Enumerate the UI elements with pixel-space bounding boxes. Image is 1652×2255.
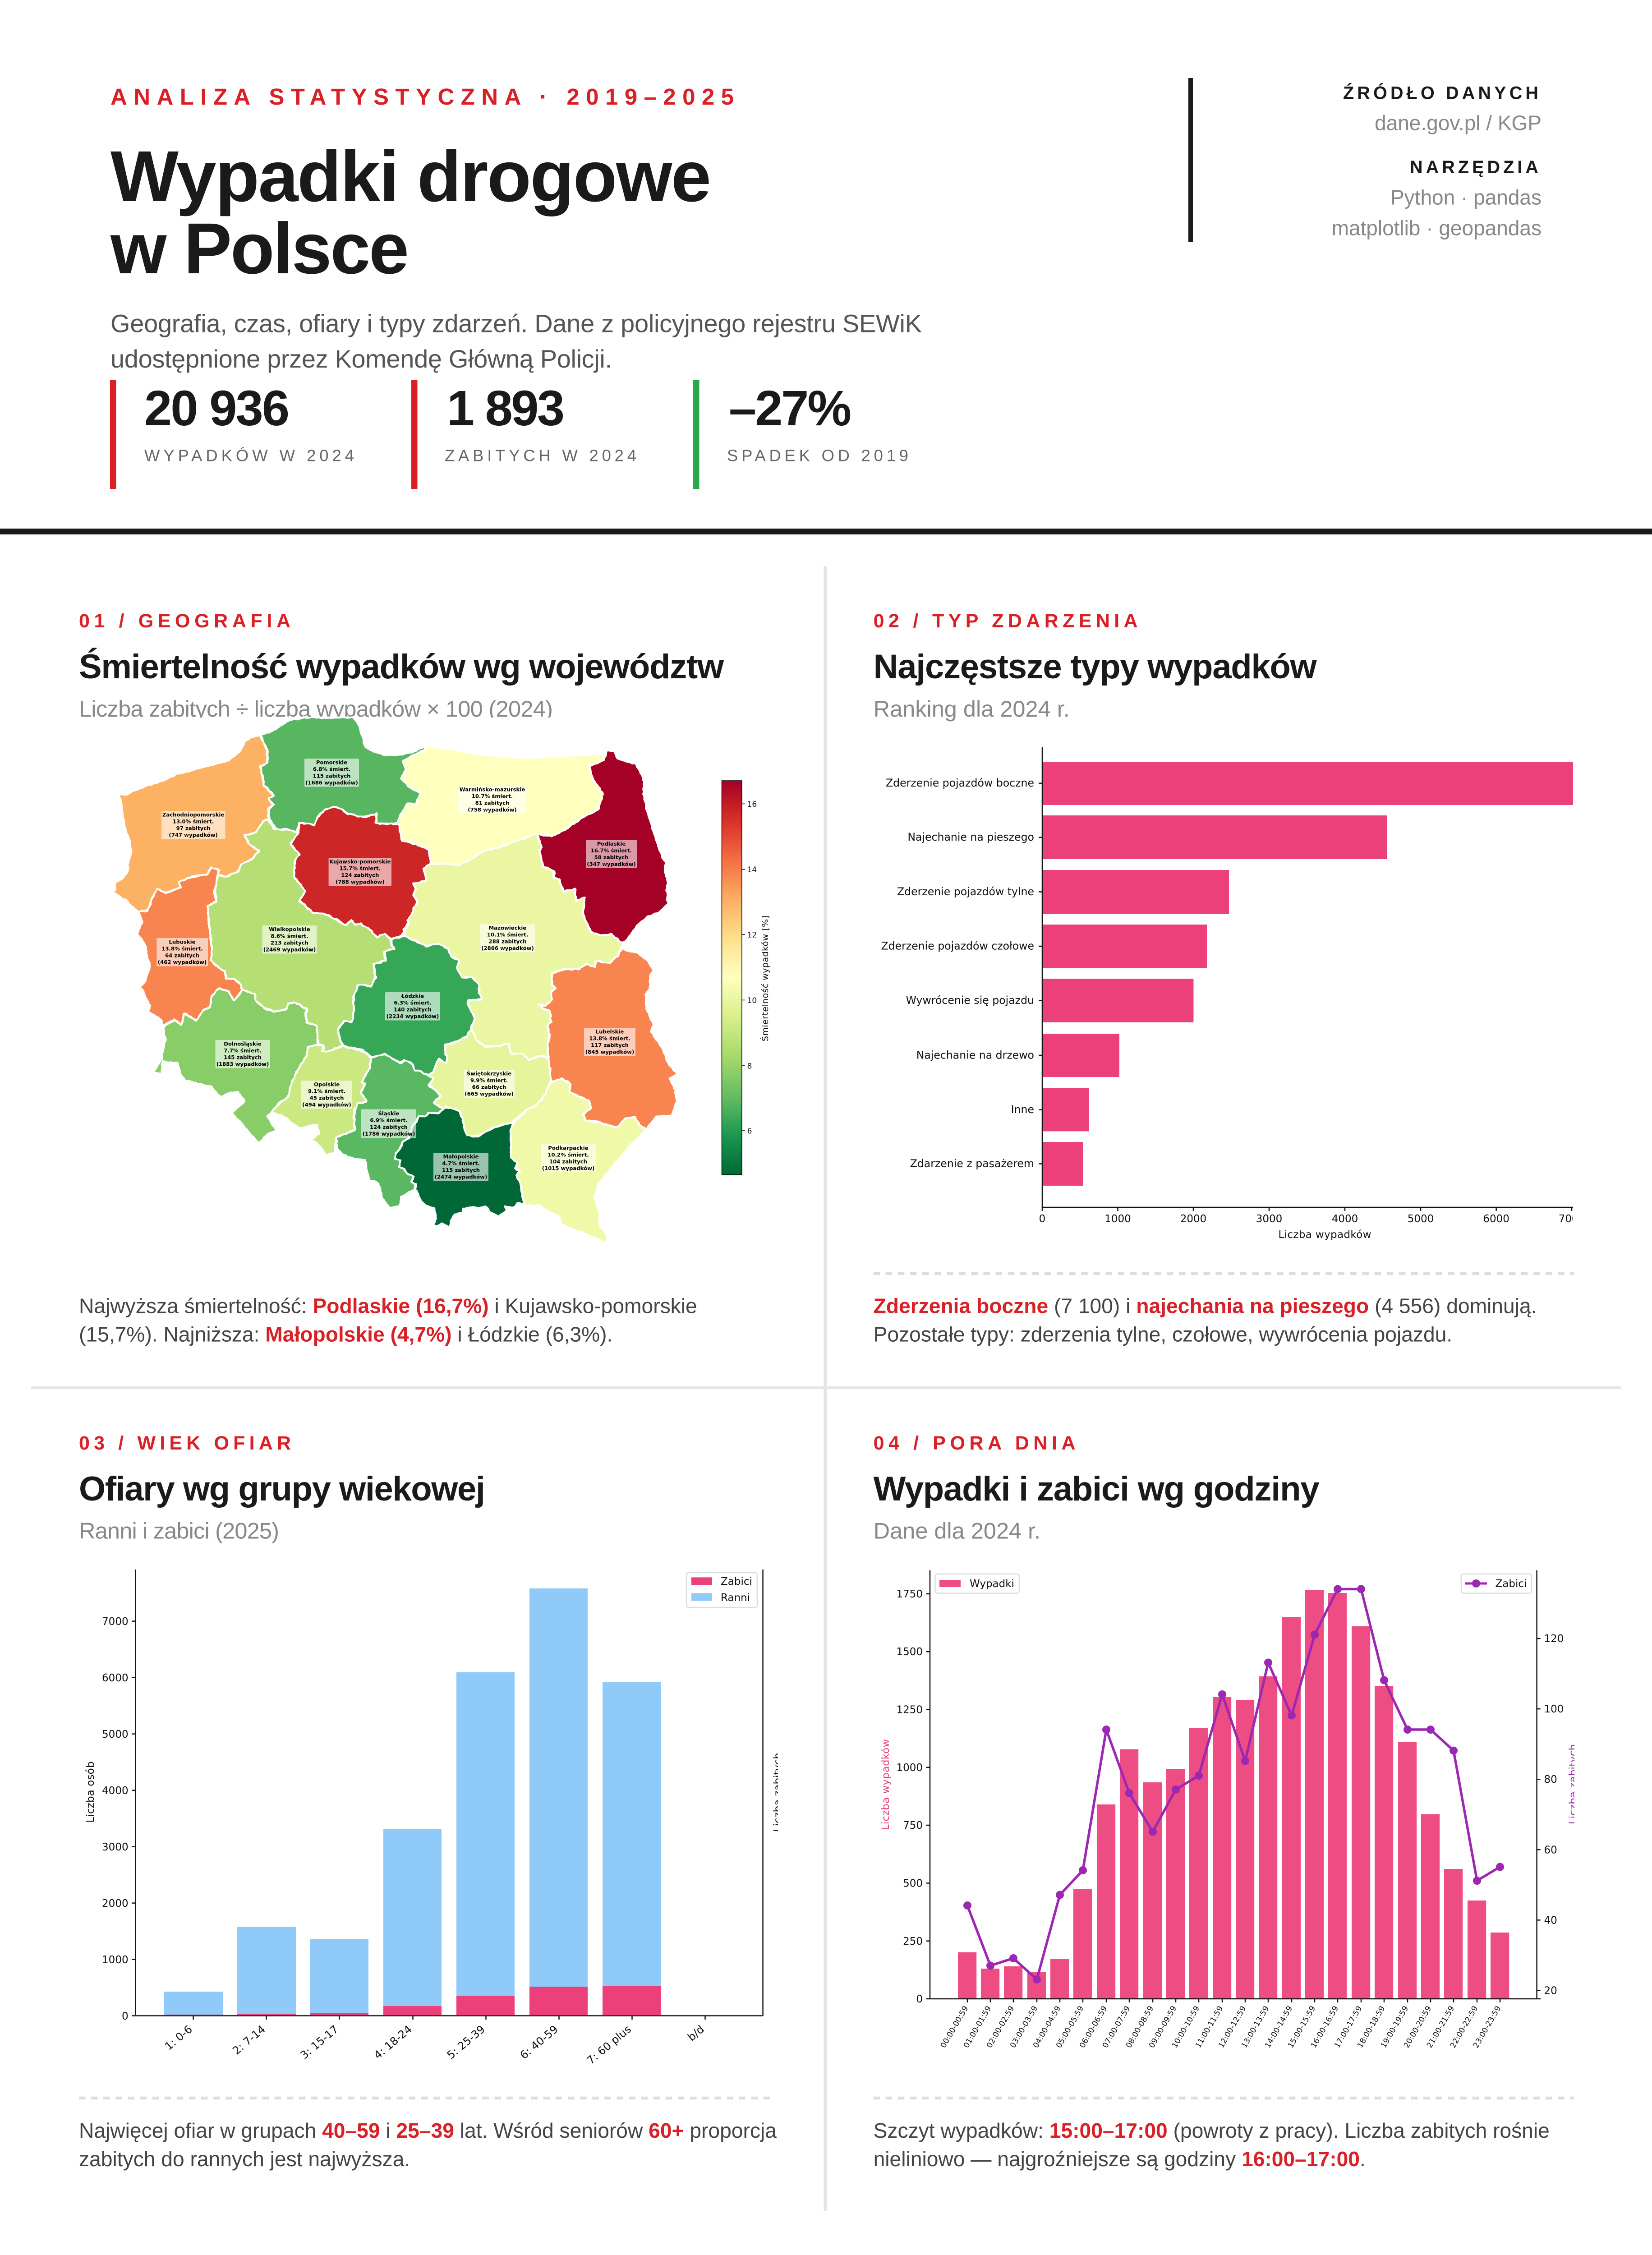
combo chart: godziny: 21:00-21:59: [1425, 2004, 1456, 2050]
combo chart: godziny: 04:00-04:59: [1031, 2004, 1063, 2050]
map label: Lubuskie: Lubuskie: [169, 939, 196, 945]
map label: Warmińsko-mazurskie: [458, 786, 526, 814]
combo chart: godziny: Liczba zabitych: [1567, 1744, 1579, 1824]
stacked bar chart: wiek: 7000: [102, 1616, 129, 1628]
combo chart: godziny: 16:00-16:59: [1309, 2004, 1340, 2050]
section subtitle 04: Dane dla 2024 r.: [874, 1518, 1040, 1544]
note 02: [874, 1294, 1537, 1346]
stacked bar chart: wiek: 6: 40-59: [518, 2023, 561, 2062]
map label: Podlaskie: 58 zabitych: [594, 854, 628, 861]
colorbar legend: 16: [747, 800, 757, 809]
section subtitle 01: Liczba zabitych ÷ liczba wypadków × 100 (2024): [79, 696, 553, 722]
header: [110, 78, 1542, 489]
map label: Zachodniopomorskie: [161, 811, 225, 839]
region: Zachodniopomorskie: [113, 735, 274, 911]
map label: Warmińsko-mazurskie: Warmińsko-mazurskie: [460, 787, 525, 793]
region: Kujawsko-pomorskie: [290, 807, 431, 939]
stacked bar chart: wiek: 5: 25-39: [445, 2023, 488, 2062]
stacked bar chart: wiek: [85, 1569, 805, 2067]
bar chart: typy wypadków: [881, 747, 1600, 1241]
map label: Pomorskie: (1686 wypadków): [305, 780, 358, 786]
map label: Mazowieckie: 288 zabitych: [489, 939, 526, 945]
legend: zabici: [1461, 1574, 1532, 1593]
map label: Mazowieckie: Mazowieckie: [489, 925, 526, 931]
combo chart: godziny: 40: [1544, 1915, 1557, 1927]
note 01: Najwyższa śmiertelność: Podlaskie (16,7%) i Kujawsko-pomorskie: [79, 1294, 697, 1318]
bar chart: typy wypadków: 4000: [1332, 1213, 1358, 1225]
map label: Wielkopolskie: [262, 925, 317, 953]
bar chart: typy wypadków: Inne: [1011, 1103, 1034, 1116]
colorbar legend: 12: [747, 931, 757, 940]
map label: Zachodniopomorskie: 13.0% śmiert.: [173, 819, 214, 825]
note 01: (15,7%). Najniższa: Małopolskie (4,7%) i Łódzkie (6,3%).: [79, 1323, 612, 1346]
combo chart: godziny: 1000: [896, 1762, 923, 1774]
source block: NARZĘDZIA: [1410, 157, 1538, 177]
note 01: [79, 1294, 697, 1346]
combo chart: godziny: 14:00-14:59: [1263, 2004, 1294, 2050]
combo chart: godziny: 15:00-15:59: [1286, 2004, 1317, 2050]
note 04: [874, 2119, 1550, 2171]
map label: Podkarpackie: 10.2% śmiert.: [548, 1152, 589, 1158]
map label: Pomorskie: 115 zabitych: [313, 773, 350, 779]
note 04: Szczyt wypadków: 15:00–17:00 (powroty z pracy). Liczba zabitych rośnie: [874, 2119, 1550, 2142]
region: Małopolskie: [395, 1107, 525, 1228]
source block: Python · pandas: [1390, 186, 1542, 209]
combo chart: godziny: 13:00-13:59: [1240, 2004, 1271, 2050]
colorbar legend: Śmiertelność wypadków [%]: [759, 916, 770, 1041]
region: Podlaskie: [537, 750, 668, 943]
map label: Lubelskie: [584, 1028, 635, 1056]
map label: Małopolskie: [433, 1153, 488, 1181]
bar chart: typy wypadków: 3000: [1256, 1213, 1282, 1225]
map label: Lubelskie: (845 wypadków): [585, 1049, 634, 1055]
map label: Dolnośląskie: (1883 wypadków): [216, 1061, 269, 1068]
region: Łódzkie: [337, 936, 482, 1076]
combo chart: godziny: 22:00-22:59: [1449, 2004, 1480, 2050]
map label: Świętokrzyskie: Świętokrzyskie: [467, 1070, 511, 1077]
stacked bar chart: wiek: 6000: [102, 1672, 129, 1684]
combo chart: godziny: 500: [903, 1878, 923, 1890]
map label: Opolskie: [301, 1081, 352, 1109]
combo chart: godziny: 80: [1544, 1774, 1557, 1786]
map label: Lubuskie: 13.8% śmiert.: [161, 946, 203, 952]
map label: Warmińsko-mazurskie: 81 zabitych: [475, 800, 509, 806]
panel: wiek ofiar: [79, 1432, 805, 2171]
combo chart: godziny: 01:00-01:59: [962, 2004, 993, 2050]
bar chart: typy wypadków: Wywrócenie się pojazdu: [906, 994, 1034, 1007]
combo chart: godziny: 00:00-00:59: [939, 2004, 970, 2050]
map label: Kujawsko-pomorskie: (788 wypadków): [336, 879, 385, 885]
map label: Kujawsko-pomorskie: 124 zabitych: [341, 872, 379, 879]
region: Wielkopolskie: [207, 819, 395, 1052]
map label: Lubelskie: 117 zabitych: [591, 1042, 629, 1049]
combo chart: godziny: 0: [916, 1993, 923, 2005]
panel: pora dnia: [874, 1432, 1601, 2171]
stacked bar chart: wiek: Liczba osób: [85, 1762, 97, 1823]
map label: Świętokrzyskie: (665 wypadków): [465, 1091, 514, 1097]
map label: Podkarpackie: Podkarpackie: [548, 1145, 589, 1151]
map label: Kujawsko-pomorskie: [329, 858, 391, 886]
stacked bar chart: wiek: 2: 7-14: [230, 2023, 268, 2057]
combo chart: godziny: 08:00-08:59: [1124, 2004, 1155, 2050]
legend: wiek: Ranni: [721, 1592, 750, 1604]
map label: Małopolskie: (2474 wypadków): [435, 1174, 487, 1180]
source block: ŹRÓDŁO DANYCH: [1343, 83, 1538, 103]
map label: Podlaskie: [586, 840, 637, 868]
note 02: Pozostałe typy: zderzenia tylne, czołowe, wywrócenia pojazdu.: [874, 1323, 1452, 1346]
section subtitle 03: Ranni i zabici (2025): [79, 1518, 279, 1544]
map label: Dolnośląskie: [216, 1040, 270, 1068]
bar chart: typy wypadków: Zderzenie pojazdów boczne: [886, 777, 1034, 789]
stat: zabici: 1 893: [447, 381, 565, 436]
map label: Łódzkie: Łódzkie: [401, 993, 424, 999]
colorbar legend: 10: [747, 996, 757, 1005]
stacked bar chart: wiek: 5000: [102, 1729, 129, 1740]
bar chart: typy wypadków: Zdarzenie z pasażerem: [910, 1157, 1034, 1170]
combo chart: godziny: 09:00-09:59: [1147, 2004, 1178, 2050]
legend: wiek: [686, 1573, 757, 1607]
map label: Opolskie: 45 zabitych: [310, 1095, 344, 1101]
combo chart: godziny: [880, 1570, 1601, 2050]
legend: wypadki: Wypadki: [970, 1578, 1014, 1590]
subtitle: udostępnione przez Komendę Główną Policji.: [110, 345, 612, 373]
map label: Lubuskie: [156, 938, 208, 966]
combo chart: godziny: 06:00-06:59: [1078, 2004, 1109, 2050]
stacked bar chart: wiek: 2000: [102, 1898, 129, 1910]
stacked bar chart: wiek: 3000: [102, 1841, 129, 1853]
map label: Pomorskie: Pomorskie: [316, 759, 347, 766]
section heading 04: Wypadki i zabici wg godziny: [874, 1470, 1320, 1508]
map label: Podlaskie: Podlaskie: [597, 841, 626, 847]
region: Opolskie: [272, 1045, 371, 1155]
region: Świętokrzyskie: [428, 1030, 551, 1137]
stacked bar chart: wiek: 1: 0-6: [162, 2023, 195, 2053]
section label 02: 02 / TYP ZDARZENIA: [874, 610, 1138, 632]
combo chart: godziny: Liczba wypadków: [880, 1739, 892, 1830]
eyebrow: ANALIZA STATYSTYCZNA · 2019–2025: [110, 84, 734, 110]
bar chart: typy wypadków: Liczba wypadków: [1278, 1229, 1371, 1241]
map label: Opolskie: (494 wypadków): [302, 1102, 351, 1108]
map label: Podlaskie: 16.7% śmiert.: [591, 847, 632, 854]
combo chart: godziny: 750: [903, 1820, 923, 1832]
map label: Zachodniopomorskie: (747 wypadków): [169, 832, 218, 838]
bar chart: typy wypadków: Zderzenie pojazdów tylne: [897, 885, 1034, 898]
combo chart: godziny: 60: [1544, 1845, 1557, 1856]
combo chart: godziny: 11:00-11:59: [1194, 2004, 1225, 2050]
panel: typ zdarzenia: [874, 610, 1600, 1346]
combo chart: godziny: 250: [903, 1936, 923, 1947]
note 04: nieliniowo — najgroźniejsze są godziny 16:00–17:00.: [874, 2147, 1366, 2171]
map label: Łódzkie: 140 zabitych: [394, 1007, 432, 1013]
combo chart: godziny: 120: [1544, 1633, 1564, 1645]
note 03: Najwięcej ofiar w grupach 40–59 i 25–39 lat. Wśród seniorów 60+ proporcja: [79, 2119, 777, 2142]
map label: Świętokrzyskie: 9.9% śmiert.: [470, 1077, 508, 1084]
subtitle: Geografia, czas, ofiary i typy zdarzeń. Dane z policyjnego rejestru SEWiK: [110, 309, 922, 338]
colorbar legend: 6: [747, 1127, 752, 1136]
map label: Mazowieckie: [480, 924, 535, 953]
combo chart: godziny: 1750: [896, 1588, 923, 1600]
map label: Śląskie: [361, 1109, 416, 1138]
bar chart: typy wypadków: Zderzenie pojazdów czołowe: [881, 940, 1034, 953]
bar chart: typy wypadków: 1000: [1104, 1213, 1131, 1225]
map label: Łódzkie: 6.3% śmiert.: [394, 1000, 432, 1006]
section subtitle 02: Ranking dla 2024 r.: [874, 696, 1070, 722]
stat: spadek: –27%: [729, 381, 851, 436]
section heading 02: Najczęstsze typy wypadków: [874, 648, 1317, 686]
map label: Wielkopolskie: 8.6% śmiert.: [271, 933, 308, 939]
stat: wypadki: WYPADKÓW W 2024: [144, 446, 354, 465]
note 02: Zderzenia boczne (7 100) i najechania na pieszego (4 556) dominują.: [874, 1294, 1537, 1318]
stat: zabici: ZABITYCH W 2024: [445, 446, 636, 465]
combo chart: godziny: 12:00-12:59: [1217, 2004, 1248, 2050]
map label: Małopolskie: 115 zabitych: [442, 1167, 480, 1174]
bar chart: typy wypadków: 2000: [1180, 1213, 1206, 1225]
combo chart: godziny: 23:00-23:59: [1472, 2004, 1503, 2050]
title: [110, 136, 711, 289]
stacked bar chart: wiek: Liczba zabitych: [772, 1753, 784, 1832]
map label: Wielkopolskie: 213 zabitych: [271, 940, 308, 946]
title: Wypadki drogowe: [110, 136, 711, 216]
combo chart: godziny: 02:00-02:59: [985, 2004, 1016, 2050]
section heading 01: Śmiertelność wypadków wg województw: [79, 648, 724, 686]
colorbar legend: 14: [747, 865, 757, 874]
map label: Mazowieckie: (2866 wypadków): [481, 945, 534, 952]
source block: dane.gov.pl / KGP: [1375, 111, 1542, 134]
map label: Lubelskie: 13.8% śmiert.: [589, 1035, 630, 1042]
stacked bar chart: wiek: 4000: [102, 1785, 129, 1797]
stat: spadek: [693, 380, 908, 489]
bar chart: typy wypadków: Najechanie na pieszego: [907, 831, 1034, 843]
map label: Opolskie: Opolskie: [314, 1081, 340, 1088]
choropleth map: [113, 718, 679, 1244]
region: Śląskie: [336, 1054, 443, 1208]
map label: Śląskie: 124 zabitych: [370, 1124, 408, 1130]
section label 03: 03 / WIEK OFIAR: [79, 1432, 291, 1454]
region: Podkarpackie: [511, 1079, 647, 1244]
map label: Dolnośląskie: Dolnośląskie: [224, 1041, 262, 1047]
legend: zabici: Zabici: [1496, 1578, 1527, 1590]
region: Lubelskie: [538, 947, 679, 1129]
map label: Kujawsko-pomorskie: Kujawsko-pomorskie: [329, 859, 391, 865]
section heading 03: Ofiary wg grupy wiekowej: [79, 1470, 485, 1508]
map label: Podkarpackie: [541, 1144, 596, 1172]
map label: Mazowieckie: 10.1% śmiert.: [487, 932, 528, 938]
combo chart: godziny: 20: [1544, 1985, 1557, 1997]
colorbar legend: [722, 781, 770, 1175]
map label: Podkarpackie: (1015 wypadków): [542, 1165, 594, 1172]
bar chart: typy wypadków: Najechanie na drzewo: [916, 1049, 1034, 1062]
combo chart: godziny: 17:00-17:59: [1333, 2004, 1364, 2050]
bar chart: typy wypadków: 5000: [1408, 1213, 1434, 1225]
stacked bar chart: wiek: 0: [122, 2011, 129, 2022]
combo chart: godziny: 100: [1544, 1703, 1564, 1715]
stacked bar chart: wiek: b/d: [685, 2023, 707, 2043]
stacked bar chart: wiek: 3: 15-17: [298, 2023, 341, 2062]
combo chart: godziny: 18:00-18:59: [1356, 2004, 1387, 2050]
source block: [1188, 78, 1542, 242]
map label: Małopolskie: Małopolskie: [443, 1154, 479, 1160]
panel: geografia: [77, 610, 812, 1346]
section label 04: 04 / PORA DNIA: [874, 1432, 1076, 1454]
map label: Opolskie: 9.1% śmiert.: [308, 1088, 345, 1095]
map label: Lubelskie: Lubelskie: [596, 1029, 624, 1035]
map label: Wielkopolskie: (2469 wypadków): [263, 947, 316, 953]
note 03: [79, 2119, 777, 2171]
map label: Dolnośląskie: 7.7% śmiert.: [224, 1048, 262, 1054]
stacked bar chart: wiek: 7: 60 plus: [584, 2023, 634, 2067]
combo chart: godziny: 19:00-19:59: [1379, 2004, 1410, 2050]
stacked bar chart: wiek: 4: 18-24: [372, 2023, 414, 2062]
map label: Warmińsko-mazurskie: 10.7% śmiert.: [472, 793, 513, 800]
title: w Polsce: [110, 208, 409, 289]
colorbar legend: 8: [747, 1062, 752, 1071]
region: Lubuskie: [138, 867, 242, 1026]
map label: Dolnośląskie: 145 zabitych: [224, 1054, 262, 1061]
combo chart: godziny: 03:00-03:59: [1008, 2004, 1040, 2050]
map label: Świętokrzyskie: 66 zabitych: [472, 1084, 506, 1091]
stat: wypadki: [110, 380, 354, 489]
map label: Lubuskie: (462 wypadków): [158, 959, 207, 966]
map label: Wielkopolskie: Wielkopolskie: [269, 926, 310, 933]
stat: zabici: [411, 380, 636, 489]
combo chart: godziny: 05:00-05:59: [1054, 2004, 1086, 2050]
region: Warmińsko-mazurskie: [397, 746, 604, 865]
combo chart: godziny: 1500: [896, 1646, 923, 1658]
stat: wypadki: 20 936: [144, 381, 290, 436]
stat: spadek: SPADEK OD 2019: [727, 446, 908, 465]
bar chart: typy wypadków: 7000: [1559, 1213, 1585, 1225]
map label: Łódzkie: (2234 wypadków): [387, 1013, 439, 1020]
map label: Łódzkie: [385, 992, 440, 1020]
map label: Śląskie: (1786 wypadków): [363, 1131, 415, 1137]
map label: Pomorskie: 6.8% śmiert.: [313, 766, 350, 773]
combo chart: godziny: 20:00-20:59: [1402, 2004, 1433, 2050]
region: Mazowieckie: [405, 834, 625, 1060]
map label: Lubuskie: 64 zabitych: [165, 953, 199, 959]
combo chart: godziny: 07:00-07:59: [1101, 2004, 1132, 2050]
map label: Podlaskie: (347 wypadków): [587, 861, 636, 867]
map label: Warmińsko-mazurskie: (758 wypadków): [468, 807, 517, 813]
map label: Śląskie: 6.9% śmiert.: [370, 1117, 408, 1123]
map label: Zachodniopomorskie: 97 zabitych: [176, 825, 211, 832]
combo chart: godziny: 1250: [896, 1704, 923, 1716]
map label: Śląskie: Śląskie: [378, 1110, 400, 1117]
legend: wypadki: [935, 1574, 1019, 1593]
map label: Kujawsko-pomorskie: 15.7% śmiert.: [340, 865, 381, 872]
map label: Pomorskie: [304, 759, 359, 787]
map label: Świętokrzyskie: [464, 1070, 515, 1098]
map label: Podkarpackie: 104 zabitych: [549, 1159, 587, 1165]
subtitle: [110, 309, 922, 373]
section label 01: 01 / GEOGRAFIA: [79, 610, 290, 632]
note 03: zabitych do rannych jest najwyższa.: [79, 2147, 410, 2171]
stacked bar chart: wiek: 1000: [102, 1954, 129, 1966]
combo chart: godziny: 10:00-10:59: [1170, 2004, 1201, 2050]
bar chart: typy wypadków: 0: [1039, 1213, 1045, 1225]
region: Dolnośląskie: [153, 989, 318, 1143]
source block: matplotlib · geopandas: [1332, 216, 1542, 240]
map label: Małopolskie: 4.7% śmiert.: [442, 1160, 480, 1167]
legend: wiek: Zabici: [721, 1576, 752, 1588]
bar chart: typy wypadków: 6000: [1483, 1213, 1509, 1225]
map label: Zachodniopomorskie: Zachodniopomorskie: [162, 812, 224, 818]
region: Pomorskie: [261, 718, 424, 833]
